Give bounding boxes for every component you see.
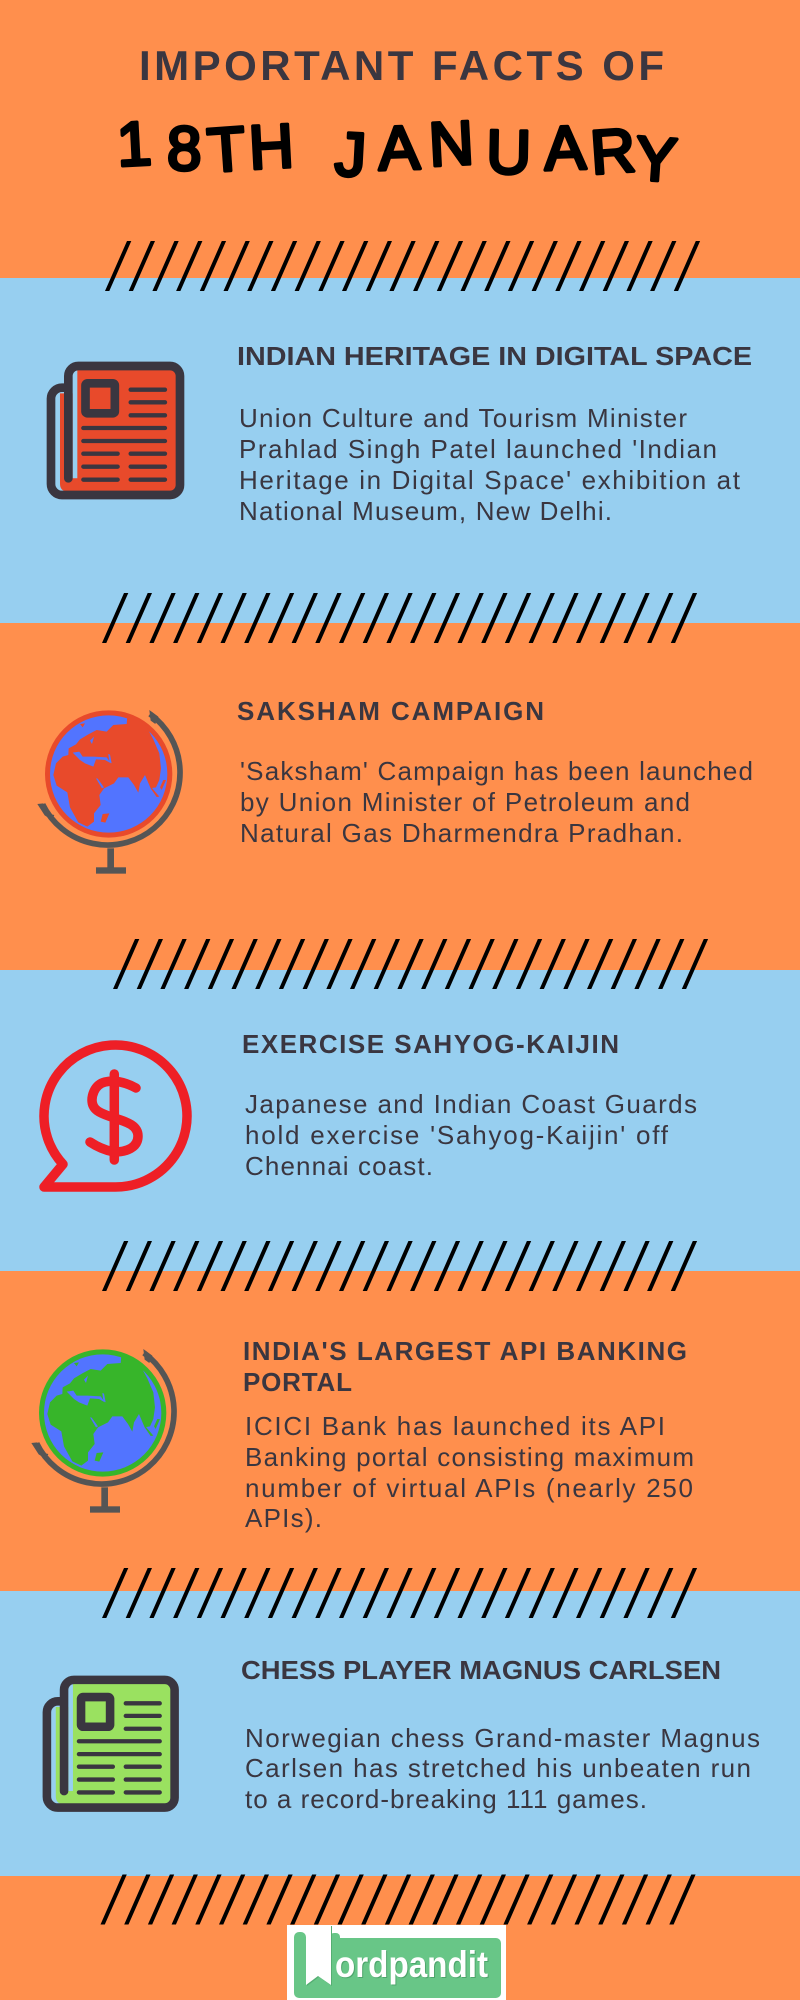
body text	[240, 756, 753, 848]
logo: Wordpandit: ordpandit	[335, 1944, 488, 1985]
panel: chess player Magnus Carlsen	[0, 1591, 800, 1876]
body text: Carlsen has stretched his unbeaten run	[245, 1753, 751, 1783]
body text: ICICI Bank has launched its API	[245, 1411, 665, 1441]
body text: Chennai coast.	[245, 1151, 433, 1181]
body text: National Museum, New Delhi.	[239, 496, 612, 526]
panel: Indian heritage in digital space	[0, 278, 800, 623]
body text: to a record-breaking 111 games.	[245, 1784, 647, 1814]
panel: footer	[0, 1876, 800, 2000]
title: date: 18THJANUARY	[115, 109, 679, 196]
icon: green newspaper	[47, 1680, 175, 1808]
panel: India's largest API banking portal	[0, 1271, 800, 1591]
body text	[245, 1723, 760, 1814]
logo: Wordpandit	[287, 1925, 506, 2000]
heading: SAKSHAM CAMPAIGN	[237, 696, 544, 726]
body text: by Union Minister of Petroleum and	[240, 787, 690, 817]
heading: INDIAN HERITAGE IN DIGITAL SPACE	[237, 341, 752, 371]
body text: Heritage in Digital Space' exhibition at	[239, 465, 741, 495]
body text	[239, 403, 741, 526]
body text: Norwegian chess Grand-master Magnus	[245, 1723, 760, 1753]
body text: Banking portal consisting maximum	[245, 1442, 694, 1472]
body text: number of virtual APIs (nearly 250	[245, 1473, 693, 1503]
heading: PORTAL	[243, 1367, 352, 1397]
heading: EXERCISE SAHYOG-KAIJIN	[242, 1029, 619, 1059]
heading: INDIA'S LARGEST API BANKING	[243, 1336, 687, 1366]
panel: Exercise Sahyog-Kaijin	[0, 970, 800, 1271]
icon: dollar speech bubble	[44, 1045, 187, 1187]
icon: green globe	[31, 1349, 174, 1513]
body text: Union Culture and Tourism Minister	[239, 403, 687, 433]
body text	[245, 1089, 697, 1181]
body text: Japanese and Indian Coast Guards	[245, 1089, 697, 1119]
body text: Prahlad Singh Patel launched 'Indian	[239, 434, 717, 464]
body text	[245, 1411, 694, 1533]
body text: hold exercise 'Sahyog-Kaijin' off	[245, 1120, 669, 1150]
body text: APIs).	[245, 1503, 322, 1533]
heading: CHESS PLAYER MAGNUS CARLSEN	[241, 1655, 721, 1685]
body text: 'Saksham' Campaign has been launched	[240, 756, 753, 786]
body text: Natural Gas Dharmendra Pradhan.	[240, 818, 683, 848]
title: important facts of: IMPORTANT FACTS OF	[139, 42, 664, 89]
panel: Saksham campaign	[0, 623, 800, 970]
icon: red globe	[37, 710, 180, 874]
panel: header	[0, 0, 800, 278]
heading	[243, 1336, 687, 1397]
icon: red newspaper	[51, 366, 180, 495]
